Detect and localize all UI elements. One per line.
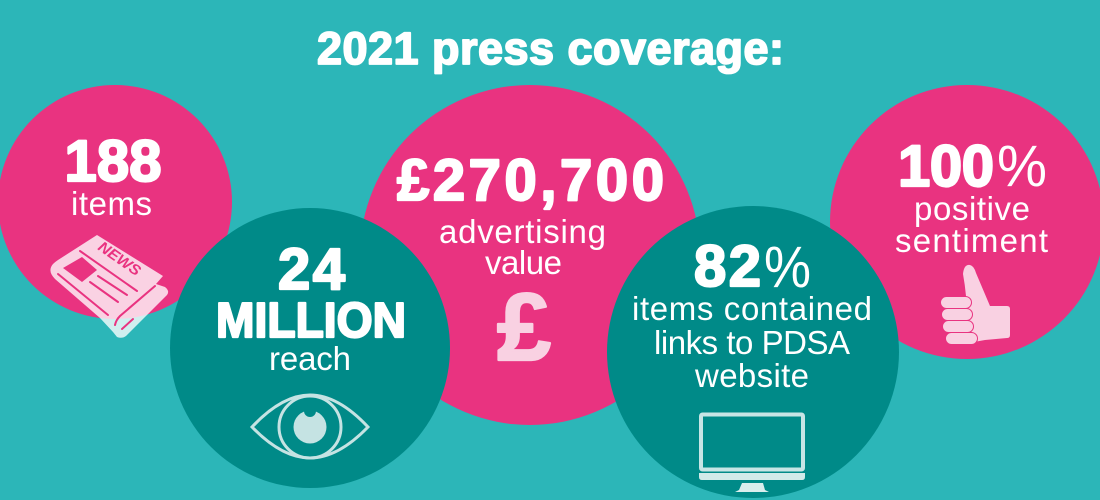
label: items contained links to PDSA website: items contained bbox=[632, 290, 872, 327]
stat: 188: 188 bbox=[64, 129, 162, 194]
stat: 82%: % bbox=[764, 235, 811, 300]
stat: 24 million: MILLION bbox=[216, 294, 406, 348]
icon: thumbs up bbox=[940, 265, 1010, 344]
label: items contained links to PDSA website: website bbox=[694, 357, 809, 394]
icon: computer monitor bbox=[699, 414, 805, 492]
panel: 188 items bbox=[0, 85, 232, 338]
panel: 100% positive sentiment bbox=[830, 85, 1100, 359]
icon text: NEWS: NEWS bbox=[95, 238, 144, 280]
label: items contained links to PDSA website bbox=[632, 290, 872, 394]
icon: eye bbox=[252, 395, 368, 458]
label: positive sentiment bbox=[895, 190, 1048, 259]
stat: 100% bbox=[898, 134, 1047, 199]
label: items contained links to PDSA website: links to PDSA bbox=[654, 324, 850, 361]
panel: £270,700 advertising value bbox=[360, 85, 700, 425]
label: advertising value: value bbox=[485, 244, 562, 281]
stat: 100%: 100 bbox=[898, 134, 994, 199]
panel: 82% items contained links bbox=[607, 206, 899, 498]
stat: 82% bbox=[694, 234, 811, 300]
label: advertising value bbox=[439, 213, 606, 281]
label: advertising value: advertising bbox=[439, 213, 606, 250]
icon: pound sign: £ bbox=[497, 274, 551, 381]
panel: 24 million reach bbox=[170, 208, 450, 488]
title: 2021 press coverage: bbox=[317, 23, 784, 74]
label: positive sentiment: positive bbox=[914, 190, 1030, 227]
stat: 24 million bbox=[216, 237, 406, 348]
stat: 82%: 82 bbox=[694, 234, 761, 299]
stat: £270,700: £270,700 bbox=[397, 148, 664, 213]
label: reach: reach bbox=[269, 340, 351, 377]
label: positive sentiment: sentiment bbox=[895, 222, 1048, 259]
icon: newspaper bbox=[50, 235, 168, 338]
stat: 100%: % bbox=[997, 134, 1047, 199]
label: items: items bbox=[71, 185, 152, 222]
stat: 24 million: 24 bbox=[278, 237, 345, 302]
